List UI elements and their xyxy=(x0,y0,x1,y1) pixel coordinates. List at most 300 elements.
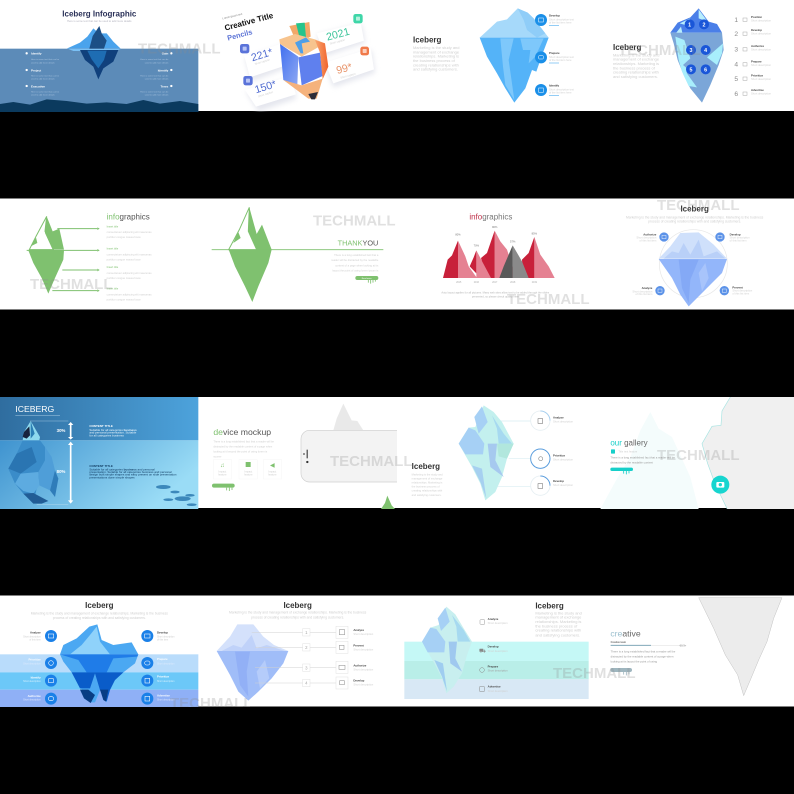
numbers: 2 xyxy=(305,645,308,650)
right items: Advertise xyxy=(157,693,170,697)
icon tiles xyxy=(240,14,369,85)
faint iceberg xyxy=(600,412,699,509)
icon boxes xyxy=(336,626,348,689)
left list: used to add more details xyxy=(31,61,55,64)
number badges: 3 xyxy=(690,48,693,54)
heading: our gallery xyxy=(610,438,648,447)
right list: used to add more details xyxy=(145,61,168,64)
item: Prioritize: Prioritize xyxy=(553,453,566,457)
button xyxy=(355,276,378,284)
row 3 white band xyxy=(0,397,794,508)
card shadows xyxy=(245,24,375,112)
right list: Here is some text that can be xyxy=(140,74,169,77)
right list: used to add more details xyxy=(145,94,168,97)
slide: underwater iceberg xyxy=(0,397,198,509)
paragraph xyxy=(412,472,443,497)
paragraph: There is a long established fact that a reader will be xyxy=(611,649,676,653)
item: Analyze: Short description xyxy=(553,420,573,424)
water panel xyxy=(0,49,198,112)
row 2 right: mountain chart and periwinkle iceberg xyxy=(441,204,764,306)
paragraph: distracted by the readable content xyxy=(610,460,653,464)
numbered list: Position xyxy=(751,15,762,19)
axis labels: 2018 xyxy=(510,282,516,284)
paragraph: management of exchange xyxy=(413,49,460,54)
item: Develop: Short description xyxy=(730,236,750,240)
lower content: presentations done simple shapes xyxy=(89,475,135,479)
slide: periwinkle iceberg list xyxy=(217,601,374,701)
lower content: presentation. Suitable for all categories business and personal xyxy=(89,470,172,474)
lower content: CONTENT TITLE xyxy=(89,464,113,468)
numbered list: Prioritize xyxy=(751,73,764,77)
slide: iceberg four items xyxy=(626,204,764,306)
right list: Here is some text that can be xyxy=(140,58,169,61)
numbered list: Short description xyxy=(751,92,771,96)
heading underline xyxy=(15,414,60,416)
row 3 right: mint iceberg and gallery xyxy=(412,395,794,512)
heading: Iceberg xyxy=(283,601,312,610)
item: Prevent: Short description xyxy=(732,289,753,293)
paragraph: relationships. Marketing is xyxy=(412,480,443,484)
right items: of this item xyxy=(157,638,168,641)
subtitle: process of creating relationships with and satisfying customers. xyxy=(53,616,146,620)
feature tiles: feature xyxy=(268,473,277,477)
paragraph: distracted by the readable content of a page when xyxy=(611,654,674,658)
depth band 1 xyxy=(0,654,198,672)
paragraph: creating relationships with xyxy=(535,628,581,633)
mountain chart xyxy=(443,231,555,278)
left items: Authorize xyxy=(28,694,41,698)
item labels: Analyze xyxy=(353,628,364,632)
item: Analyze: Analyze xyxy=(642,286,653,290)
numbered list: Prepare xyxy=(751,59,762,63)
80% bracket: 80% xyxy=(57,469,65,474)
item text blocks: porttitor congue massa fusce xyxy=(107,297,141,301)
item labels: Develop xyxy=(353,679,365,683)
paragraph: management of exchange xyxy=(412,476,443,480)
item labels: Prevent xyxy=(353,643,364,647)
heading: THANKYOU xyxy=(338,238,378,247)
horizon line xyxy=(212,249,384,250)
upper content: CONTENT TITLE xyxy=(89,424,113,428)
subtitle: Marketing is the study and management of exchange relationships. Marketing is the business xyxy=(229,611,367,615)
item: Identify xyxy=(535,83,574,96)
item labels: Authorize xyxy=(353,663,367,667)
lower content xyxy=(89,464,177,479)
left items: Short description xyxy=(23,699,41,702)
paragraph: relationships. Marketing is xyxy=(413,54,459,59)
paragraph: and satisfying customers. xyxy=(412,493,442,497)
item labels: Short description xyxy=(353,667,374,671)
paragraph xyxy=(611,649,676,664)
connector lines xyxy=(495,421,530,486)
paragraph: and satisfying customers. xyxy=(613,74,658,79)
item: Develop: Short description xyxy=(553,483,573,487)
camera button xyxy=(711,476,729,494)
faint iceberg behind phone xyxy=(333,404,363,430)
sea floor wave xyxy=(0,99,198,112)
watermarks xyxy=(30,40,740,712)
item: Prioritize: Short description xyxy=(553,457,573,461)
pencils heading: Pencils xyxy=(226,27,253,43)
item: Authorize: Short description xyxy=(636,236,657,240)
heading: Iceberg xyxy=(85,601,114,610)
item: Prepare: Short description xyxy=(488,669,508,673)
watermark: row 1 left: TECHMALL xyxy=(138,40,220,58)
left items: of this item xyxy=(29,638,41,641)
axis labels: 2019 xyxy=(532,282,538,284)
left list: used to add more details xyxy=(31,78,55,81)
numbers: 4 xyxy=(305,681,308,686)
left list: Here is some text that can be xyxy=(31,90,60,93)
depth band 3 xyxy=(0,690,198,707)
peak labels: 57% xyxy=(510,239,516,243)
axis labels: 2015 xyxy=(456,282,462,284)
item: Develop: Develop xyxy=(730,232,741,236)
paragraph: and satisfying customers. xyxy=(413,67,458,72)
paragraph: layout the point of using lorem ipsum is xyxy=(332,269,379,273)
left list: Identify xyxy=(31,52,42,56)
left items: Identify xyxy=(31,675,41,679)
small green iceberg xyxy=(381,496,395,509)
feature tiles: Impact xyxy=(218,470,227,474)
paragraph: creating relationships with xyxy=(412,489,443,493)
feature tiles: feature xyxy=(244,473,253,477)
sub item: Title text feature xyxy=(618,450,638,454)
watermark: row 2 lower right: TECHMALL xyxy=(507,291,590,308)
paragraph xyxy=(213,439,275,459)
item: Analyze: Analyze xyxy=(488,617,499,621)
paragraph: the business process of xyxy=(535,623,578,628)
heading: ICEBERG xyxy=(15,404,55,414)
iceberg illustration xyxy=(422,607,472,693)
pencils heading: Creative Title xyxy=(224,11,275,33)
item: Identify: Short description text xyxy=(549,87,574,91)
numbers: 3 xyxy=(305,665,308,670)
right items: Short description xyxy=(157,635,175,638)
caption: presented, so please check quality here xyxy=(472,295,519,299)
item labels: Short description xyxy=(353,647,374,651)
paragraph: Marketing is the study and xyxy=(535,610,582,615)
item: Develop xyxy=(535,14,574,26)
heading: Iceberg xyxy=(613,43,642,52)
progress: Creative team xyxy=(611,641,626,644)
watermark: row 3 middle: TECHMALL xyxy=(330,453,412,470)
connector ring xyxy=(659,230,727,298)
subtitle: process of creating relationships with and satisfying customers. xyxy=(251,615,344,619)
item text blocks: consectetuer adipiscing elit maecenas xyxy=(107,252,152,256)
item text blocks: Insert title xyxy=(107,265,119,269)
paragraph xyxy=(535,610,582,637)
water band xyxy=(0,440,198,509)
number badges xyxy=(685,19,711,74)
30% bracket: 30% xyxy=(57,428,65,433)
row 2 white band xyxy=(0,198,794,310)
paragraph: sooner xyxy=(213,455,222,459)
item text blocks xyxy=(107,224,152,301)
peak labels: 70% xyxy=(474,243,480,247)
metric captions: Short caption xyxy=(329,38,346,46)
slide: thank you xyxy=(212,207,383,302)
leader lines xyxy=(252,632,336,683)
feature tiles: Impact xyxy=(244,470,253,474)
right list: Gain xyxy=(162,52,169,56)
item: Prevent: of this list item xyxy=(732,291,750,295)
item: Develop: ⛟ xyxy=(479,648,486,654)
item text blocks: porttitor congue massa fusce xyxy=(107,235,141,239)
feature tiles: ◀ xyxy=(270,463,275,469)
slide: mint iceberg xyxy=(412,405,573,500)
button: Read more xyxy=(362,277,372,280)
feature tiles: feature xyxy=(218,473,227,477)
paragraph: There is a long established fact that a reader will be xyxy=(213,439,275,443)
lower content: Suitable for all categories business and personal xyxy=(89,467,155,471)
item: Analyze: Analyze xyxy=(553,416,564,420)
row 3 left: underwater iceberg and device mockup xyxy=(0,397,421,509)
caption xyxy=(441,290,550,299)
right items: Prepare xyxy=(157,657,168,661)
iceberg illustration xyxy=(60,624,138,703)
heading: Iceberg xyxy=(412,462,440,471)
metric captions: Short caption xyxy=(254,57,271,66)
right items: Short description xyxy=(157,662,175,665)
paragraph: looking at its layout the point of using xyxy=(611,660,657,664)
row 1 left: iceberg infographic and pencils slides xyxy=(0,10,375,112)
peak labels: 80% xyxy=(455,232,461,236)
numbered list: Develop xyxy=(751,28,762,32)
slide: Iceberg Infographic xyxy=(0,10,198,112)
item labels: Short description xyxy=(353,683,374,687)
numbered list: Short description xyxy=(751,63,771,67)
item: Develop xyxy=(715,232,750,242)
item text blocks: consectetuer adipiscing elit maecenas xyxy=(107,271,152,275)
numbers xyxy=(305,630,308,686)
paragraph: relationships. Marketing is xyxy=(535,619,581,624)
number badges: 4 xyxy=(704,48,707,54)
iceberg illustration xyxy=(8,421,58,504)
item text blocks: Insert title xyxy=(107,246,119,250)
watermark: row 2 middle: TECHMALL xyxy=(313,212,396,230)
phone xyxy=(301,430,421,482)
metric numbers: 99* xyxy=(335,61,354,77)
band 3 xyxy=(404,679,589,699)
paragraph: Marketing is the study and xyxy=(412,472,443,476)
slide: our gallery xyxy=(600,395,794,512)
subtitle: process of creating relationships with and satisfying customers. xyxy=(648,220,741,224)
left items: Analyze xyxy=(30,631,41,635)
slide: banded iceberg xyxy=(0,601,198,707)
gallery grey panel xyxy=(702,395,794,512)
paragraph: the business process of xyxy=(412,484,440,488)
subtitle xyxy=(626,215,764,224)
item: Analyze xyxy=(632,286,665,296)
item: Prioritize xyxy=(531,449,573,468)
heading: infographics xyxy=(107,212,150,221)
numbered list: 5 xyxy=(734,76,738,83)
metric numbers xyxy=(250,26,354,96)
row 1 white band xyxy=(0,0,794,111)
item: Analyze xyxy=(531,411,573,430)
item: Develop: of the list item here xyxy=(549,21,572,25)
left items xyxy=(23,630,57,705)
watermark: row 2 upper right: TECHMALL xyxy=(657,197,740,214)
depth band 2 xyxy=(0,672,198,690)
paragraph: There is a long established fact that a xyxy=(334,253,379,257)
subtitle xyxy=(31,611,168,620)
item text blocks: Insert title xyxy=(107,224,119,228)
left list: Project xyxy=(31,68,41,72)
item labels: Short description xyxy=(353,632,374,636)
left list xyxy=(25,52,60,97)
metric cards xyxy=(244,23,374,107)
slide: mountain chart xyxy=(441,212,555,299)
item text blocks: Insert title xyxy=(107,286,119,290)
left list: Executive xyxy=(31,84,45,88)
feature tiles: ♫ xyxy=(220,463,225,469)
watermark: row 2 left: TECHMALL xyxy=(30,276,112,293)
lower content: design built simple shapes and easy present on slide presentation xyxy=(89,473,177,477)
peak labels: 90% xyxy=(492,225,498,229)
slide: Creative Title Pencils xyxy=(222,11,375,112)
feature tiles: Impact xyxy=(268,470,277,474)
3d pencil illustration xyxy=(279,22,328,99)
paragraph xyxy=(331,253,379,273)
watermark: row 1 right: TECHMALL xyxy=(618,42,700,59)
metric captions: Short caption xyxy=(340,72,357,80)
iceberg illustration xyxy=(670,8,724,103)
numbered list: 1 xyxy=(734,17,738,24)
left items: Short description xyxy=(23,635,41,638)
paragraph: the business process of xyxy=(613,65,656,70)
item: Prepare xyxy=(480,665,508,673)
button xyxy=(610,668,632,675)
numbered list: 6 xyxy=(734,91,738,98)
item: Prepare: Short description text xyxy=(549,55,574,59)
iceberg illustration xyxy=(217,624,288,701)
paragraph: reader will be distracted by the readable xyxy=(331,258,379,262)
left list: used to add more details xyxy=(31,94,55,97)
upper content xyxy=(89,424,137,437)
number badges: 6 xyxy=(704,67,707,73)
slide: iceberg with six numbers xyxy=(613,8,771,103)
left items: Prioritize xyxy=(29,658,41,662)
number boxes xyxy=(303,629,310,687)
item: Authorize: Authorize xyxy=(643,232,657,236)
paragraph: Marketing is the study and xyxy=(613,52,660,57)
button xyxy=(212,484,235,491)
item text blocks: porttitor congue massa fusce xyxy=(107,257,141,261)
axis labels: 2017 xyxy=(492,282,498,284)
progress: 60.3+ xyxy=(680,644,687,648)
slide: iceberg with three items xyxy=(413,8,574,103)
30% bracket xyxy=(57,422,73,440)
item: Identify: of the list item here xyxy=(549,90,572,94)
item text blocks: porttitor congue massa fusce xyxy=(107,276,141,280)
item: Prevent xyxy=(720,285,753,295)
item: Develop: of this list item xyxy=(730,238,747,242)
paragraph: distracted by the readable content of a page when xyxy=(213,444,273,448)
axis labels: 2016 xyxy=(474,282,480,284)
pencils heading: Lorem ipsum text xyxy=(222,12,243,20)
row 4 white band xyxy=(0,596,794,706)
right list: Here is some text that can be xyxy=(140,90,169,93)
progress xyxy=(611,641,687,648)
band 1 xyxy=(404,642,589,661)
right items: Short description xyxy=(157,680,175,683)
number badges: 2 xyxy=(703,22,706,28)
item: Analyze: Short description xyxy=(632,289,653,293)
item: Analyze: Short description xyxy=(488,621,508,625)
numbered list: Short description xyxy=(751,18,771,22)
upper content: Suitable for all categories business xyxy=(89,428,137,432)
numbered list: Authorize xyxy=(751,44,764,48)
slide subtitle: Here is some text that can be used to add more details xyxy=(67,19,132,23)
row 4 left: banded iceberg and periwinkle list xyxy=(0,601,374,707)
item text blocks: consectetuer adipiscing elit maecenas xyxy=(107,230,152,234)
slide: creative xyxy=(610,598,782,696)
watermark: row 4 middle: TECHMALL xyxy=(553,665,636,682)
paragraph: the business process of xyxy=(413,58,456,63)
iceberg illustration xyxy=(459,405,514,500)
right items: Develop xyxy=(157,631,168,635)
paragraph: There is a long established fact that a reader will be xyxy=(610,455,675,459)
item: Advertise xyxy=(479,685,508,693)
paragraph: and satisfying customers. xyxy=(535,632,580,637)
arrows xyxy=(27,227,100,292)
metric numbers: 2021 xyxy=(325,26,351,44)
sub item xyxy=(611,449,638,454)
paragraph: relationships. Marketing is xyxy=(613,61,659,66)
green iceberg xyxy=(229,207,272,302)
guide lines xyxy=(30,421,68,505)
right items: Short description xyxy=(157,699,175,702)
subtitle: Marketing is the study and management of exchange relationships. Marketing is the business xyxy=(626,215,764,219)
numbered list: 3 xyxy=(734,46,738,53)
item: Prepare: Prepare xyxy=(549,51,560,55)
left items: Short description xyxy=(23,662,41,665)
caption: Auto layout applies for all pictures. Many web sites allow text to be added through the slides xyxy=(441,290,550,294)
item: Develop: Develop xyxy=(549,14,560,18)
paragraph: management of exchange xyxy=(613,57,660,62)
subtitle xyxy=(229,611,367,619)
axis labels xyxy=(456,282,538,284)
button xyxy=(610,468,633,474)
numbered list xyxy=(734,15,771,98)
item: Prepare: of the list item here xyxy=(549,58,572,62)
paragraph: creating relationships with xyxy=(413,62,459,67)
slide: device mockup xyxy=(212,404,421,509)
left items: Short description xyxy=(23,680,41,683)
watermark: row 3 right: TECHMALL xyxy=(657,447,740,464)
item: Advertise: Short description xyxy=(488,689,508,693)
item text blocks: consectetuer adipiscing elit maecenas xyxy=(107,292,152,296)
metric captions: Short caption xyxy=(257,90,274,98)
paragraph: creating relationships with xyxy=(613,70,659,75)
feature tiles xyxy=(213,460,282,479)
80% bracket xyxy=(57,442,73,504)
iceberg illustration xyxy=(659,232,727,306)
numbered list: Advertise xyxy=(751,88,764,92)
heading: infographics xyxy=(469,212,512,221)
item: Develop: Short description text xyxy=(549,18,574,22)
item: Analyze: of this list item xyxy=(636,292,653,296)
upper content: and personal presentation. Suitable xyxy=(89,431,137,435)
watermark: row 4 left: TECHMALL xyxy=(170,695,252,712)
slide title: Iceberg Infographic xyxy=(62,10,137,19)
fish school xyxy=(156,485,197,506)
numbered list: Short description xyxy=(751,48,771,52)
paragraph: Marketing is the study and xyxy=(413,45,460,50)
slide: mint banded iceberg xyxy=(404,601,589,699)
